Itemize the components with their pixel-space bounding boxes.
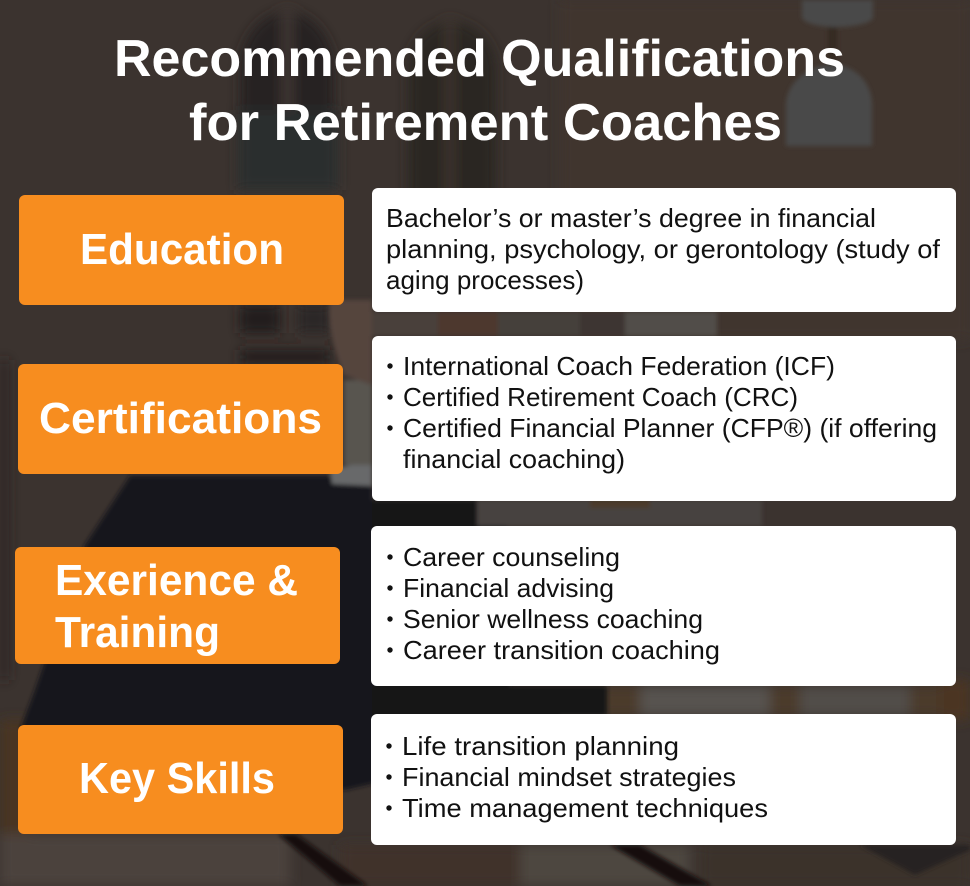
text card: education [372,188,956,312]
text card: key skills: Financial mindset strategies [402,762,736,792]
text card: key skills: Life transition planning [402,731,679,761]
text card: experience and training [371,526,956,686]
label: experience and training: Exerience & [55,556,298,605]
hair [625,312,717,336]
collar [330,460,372,486]
label: education [19,195,344,305]
label: key skills: Key Skills [79,754,275,803]
title: Recommended Qualifications [114,30,845,88]
text card: education: Bachelor’s or master’s degree in financial [386,203,876,233]
text card: education: planning, psychology, or gerontology (study of [386,234,941,264]
text card: experience and training: Senior wellness coaching [403,604,703,634]
striped shirt [477,500,762,526]
lamp [802,0,873,27]
panel: experience and training [15,526,956,686]
text card: education: aging processes) [386,265,584,295]
text card: experience and training: Career counseling [403,542,620,572]
panel: education [19,188,956,312]
text card: key skills: Time management techniques [402,793,768,823]
text card: certifications: International Coach Federation (ICF) [403,351,835,381]
panel: key skills [18,714,956,845]
text card: certifications: financial coaching) [403,444,625,474]
text card: certifications: Certified Financial Planner (CFP®) (if offering [403,413,937,443]
panel: certifications [18,336,956,501]
text card: key skills [371,714,956,845]
text card: certifications: Certified Retirement Coach (CRC) [403,382,798,412]
dark suit [20,476,560,790]
title [114,30,845,152]
label: education: Education [80,225,284,274]
label: certifications: Certifications [39,394,322,443]
text card: experience and training: Financial advising [403,573,614,603]
label: experience and training [15,547,340,664]
label: experience and training: Training [55,608,220,657]
title: for Retirement Coaches [189,94,782,152]
text card: certifications [372,336,956,501]
ear and face [329,300,372,385]
label: key skills [18,725,343,834]
label: certifications [18,364,343,474]
text card: experience and training: Career transition coaching [403,635,720,665]
